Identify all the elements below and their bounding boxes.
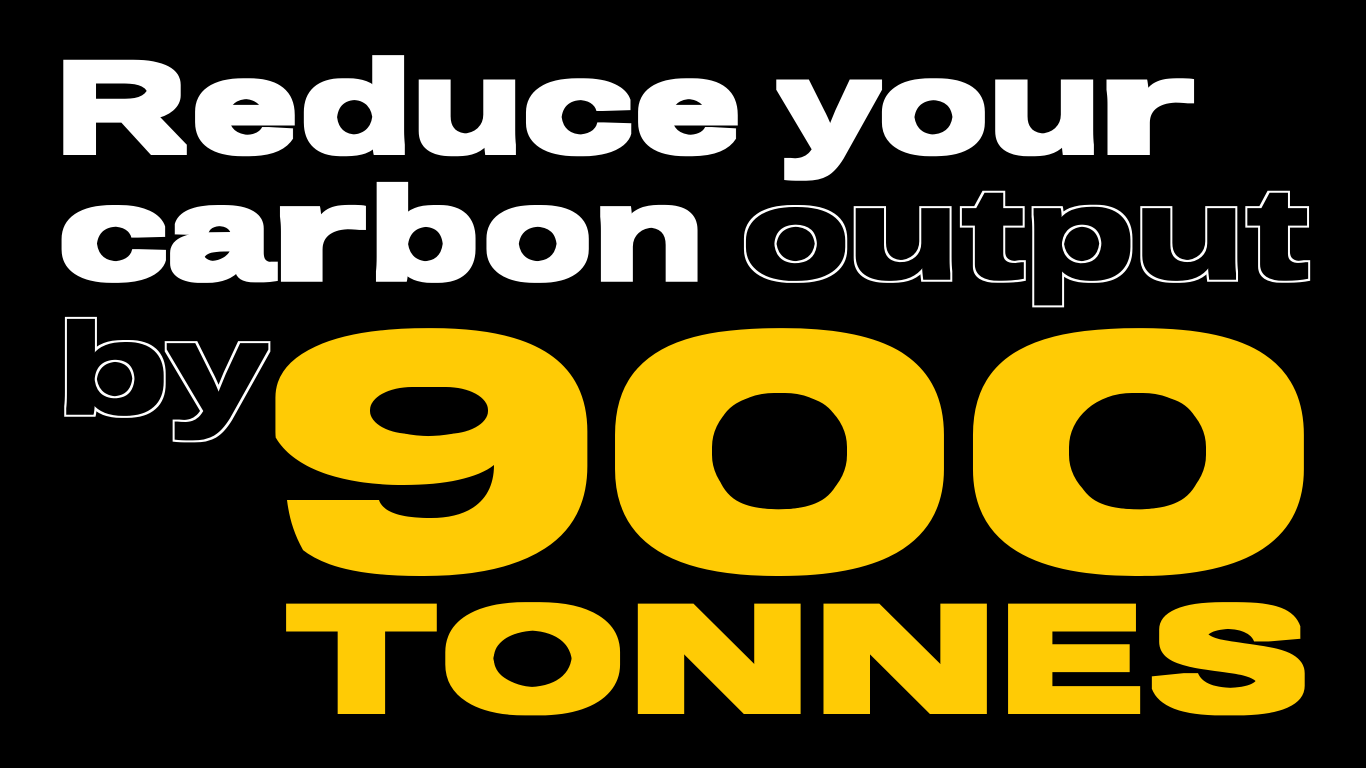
unit label TONNES: E xyxy=(1001,580,1141,739)
unit label TONNES: O xyxy=(443,580,623,739)
outlined word: by: y xyxy=(166,301,269,439)
headline line 2: carbon: n xyxy=(591,166,706,304)
unit label TONNES xyxy=(290,580,1307,739)
headline line 1 xyxy=(54,39,1195,177)
outlined word: output: t xyxy=(1246,166,1310,304)
headline line 1: u xyxy=(986,39,1104,177)
outlined word: by: b xyxy=(55,301,171,439)
big number 900: 0 xyxy=(590,283,970,620)
headline line 1: e xyxy=(190,39,298,177)
headline line 1: y xyxy=(778,39,880,177)
headline line 2: carbon: a xyxy=(168,166,275,304)
headline line 2: carbon: c xyxy=(57,166,169,304)
headline line 1: o xyxy=(878,39,989,177)
headline line 1: R xyxy=(54,39,188,177)
headline line 1: c xyxy=(521,39,634,177)
outlined word: output: p xyxy=(1022,166,1137,304)
outlined word: output xyxy=(740,166,1310,304)
unit label TONNES: S xyxy=(1152,580,1307,739)
headline line 1: r xyxy=(1092,39,1195,177)
unit label TONNES: N xyxy=(814,580,997,739)
outlined word: output: o xyxy=(740,166,851,304)
outlined word: by xyxy=(55,301,269,439)
unit label TONNES: T xyxy=(290,580,432,739)
headline line 2: carbon: b xyxy=(367,166,480,304)
outlined word: output: u xyxy=(1132,166,1248,304)
headline line 1: u xyxy=(410,39,525,177)
headline line 2: carbon: o xyxy=(482,166,593,304)
headline line 1: d xyxy=(299,39,414,177)
unit label TONNES: N xyxy=(628,580,811,739)
big number 900: 0 xyxy=(948,283,1330,620)
big number 900: 9 xyxy=(255,283,609,620)
headline line 2: carbon: r xyxy=(266,166,367,304)
outlined word: output: u xyxy=(845,166,962,304)
big number 900 xyxy=(255,283,1330,620)
headline line 1: e xyxy=(634,39,741,177)
headline line 2: carbon xyxy=(57,166,706,304)
outlined word: output: t xyxy=(960,166,1025,304)
